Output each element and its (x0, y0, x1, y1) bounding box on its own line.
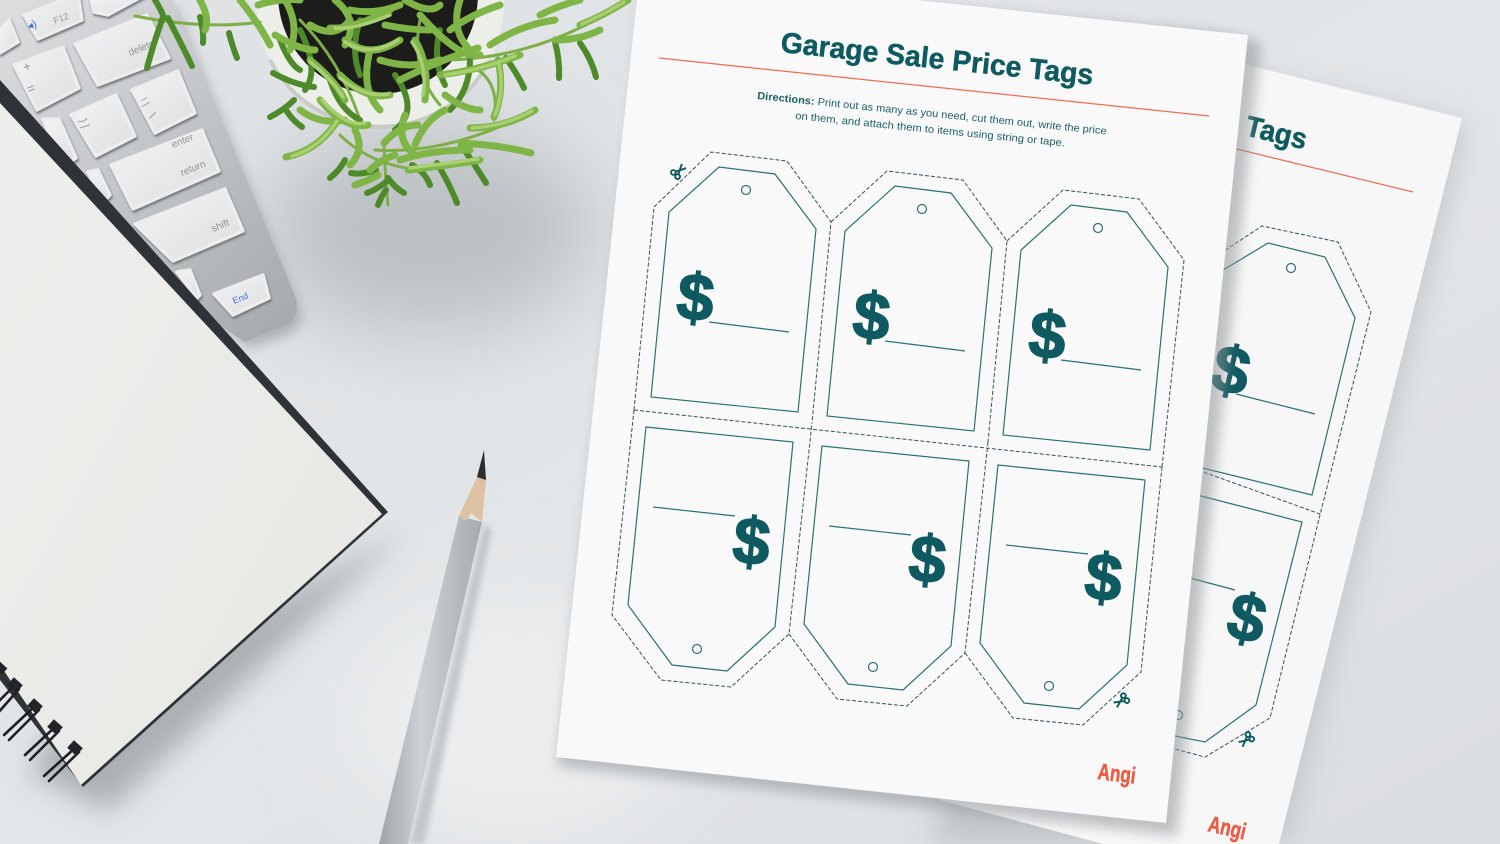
back sheet dashed cut lines (1160, 226, 1371, 757)
key labels: \ (145, 110, 160, 121)
pencil body (379, 516, 482, 844)
panel: back price tag sheet (940, 46, 1462, 844)
back sheet shadow (930, 60, 1466, 844)
back sheet top tag dollar: $ (1205, 330, 1257, 410)
plant shadow on desk (265, 125, 595, 335)
key labels: = (25, 80, 37, 97)
Angi logo: Angi (1096, 758, 1137, 789)
back sheet tag bottom (1160, 488, 1302, 742)
ring (25, 719, 63, 760)
icon: scissors top (670, 162, 688, 180)
key: shift (135, 189, 243, 261)
key: F12 (24, 0, 82, 39)
title: Garage Sale Price Tags (779, 27, 1095, 92)
keyboard (0, 0, 303, 348)
tag 1: $ (674, 258, 718, 336)
key: bracket (71, 95, 135, 156)
tag 2: $ (850, 277, 894, 355)
pencil (379, 450, 492, 844)
tag 3: $ (1026, 296, 1070, 374)
key labels: return (179, 159, 207, 179)
back sheet tag hole (1286, 264, 1296, 272)
ring (4, 698, 43, 740)
tag 5: $ (906, 520, 950, 598)
key labels: + (21, 58, 33, 75)
key: partial lower (88, 170, 110, 203)
key: partial left (43, 119, 76, 168)
tag 3 (1003, 205, 1168, 450)
leaves dark (147, 0, 596, 205)
ring (0, 662, 7, 680)
back sheet title fragment: Tags (1242, 111, 1310, 156)
key: partial bottom (177, 270, 200, 298)
pencil lead (477, 450, 486, 480)
notebook (0, 80, 403, 812)
leaves light (200, 0, 628, 185)
icon: scissors back (1237, 731, 1255, 749)
red rule (659, 58, 1209, 116)
panel: front price tag sheet (556, 0, 1248, 823)
back sheet hole bottom (1174, 710, 1182, 720)
ring (0, 677, 23, 722)
notebook shadow (28, 532, 403, 812)
pot (256, 0, 504, 126)
back sheet price line (1236, 394, 1315, 414)
plant (135, 0, 628, 205)
key labels: ! | (137, 96, 151, 109)
key labels (21, 11, 250, 306)
tag 6: $ (1082, 538, 1126, 616)
key labels: enter (170, 132, 196, 151)
leaves pale highlights (292, 2, 624, 168)
pencil sharpened wood (459, 477, 486, 522)
notebook back cover edge (0, 80, 388, 787)
tag 1 (651, 167, 816, 412)
back sheet bottom tag dollar: $ (1221, 578, 1273, 658)
tag 2 (827, 186, 992, 431)
key: end (214, 275, 269, 315)
dashed cut outlines (612, 152, 1184, 725)
back sheet tag top (1160, 243, 1355, 742)
tag 4: $ (730, 502, 774, 580)
key: delete (75, 15, 169, 85)
key labels: ◂) (26, 18, 39, 33)
key: enter return (111, 130, 219, 209)
key labels: } ] (77, 117, 91, 130)
tag 4 (628, 427, 793, 671)
spiral binding (0, 662, 83, 781)
icon: scissors bottom (1112, 692, 1130, 709)
key labels: delete (127, 38, 157, 59)
stems (135, 0, 628, 205)
key: F11 (0, 20, 18, 53)
directions text: Directions: Print out as many as you need, cut them out, write the price (757, 90, 1107, 137)
back sheet red rule (1200, 140, 1413, 192)
soil (278, 0, 478, 94)
directions text: on them, and attach them to items using string or tape. (795, 110, 1066, 149)
key labels: F12 (52, 11, 70, 26)
ring (44, 740, 83, 781)
back sheet price line bottom (1190, 578, 1235, 590)
key: plus equals (14, 47, 79, 110)
tag 6 (980, 465, 1145, 709)
key: backslash (132, 71, 195, 133)
key labels: End (231, 291, 250, 306)
tag 5 (804, 446, 969, 690)
soft lit area lower left of desk (350, 600, 690, 840)
key labels: shift (210, 218, 231, 235)
key: top row (90, 0, 143, 15)
notebook page (0, 103, 382, 785)
front sheet shadow (557, 0, 1261, 836)
